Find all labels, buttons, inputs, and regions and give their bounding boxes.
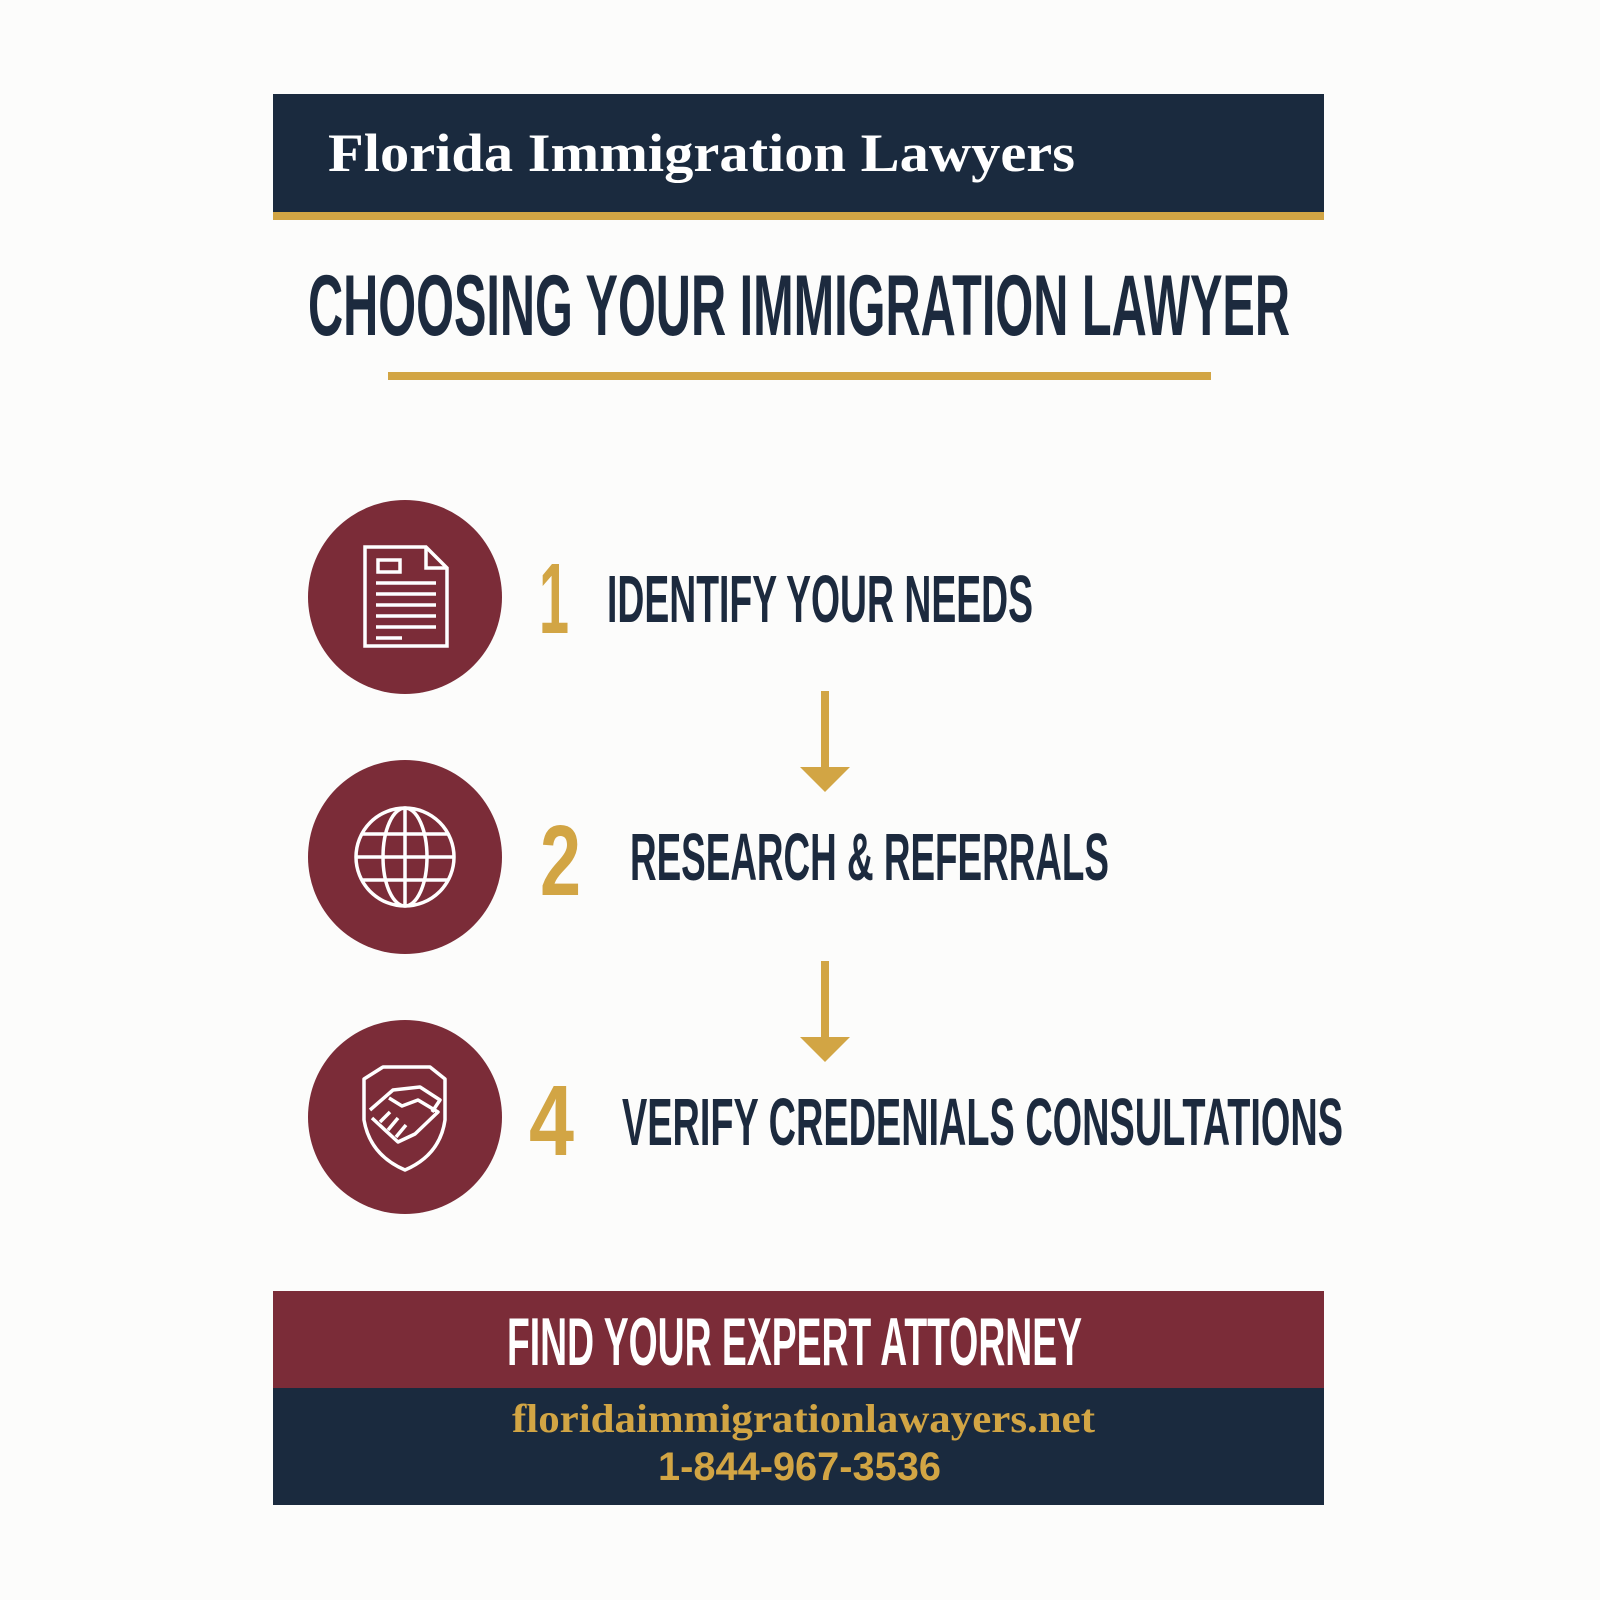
step 1 xyxy=(308,500,1033,694)
icon: globe xyxy=(308,760,502,954)
contact bar: 1-844-967-3536 xyxy=(658,1445,941,1489)
number 4: 4 xyxy=(529,1065,574,1177)
footer CTA bar xyxy=(273,1291,1324,1388)
step text 1: IDENTIFY YOUR NEEDS xyxy=(607,562,1033,637)
step 3 xyxy=(308,1020,1343,1214)
header bar: Florida Immigration Lawyers xyxy=(328,123,1075,183)
header bar xyxy=(273,94,1324,220)
number 2: 2 xyxy=(540,805,581,917)
title underline xyxy=(388,372,1211,380)
arrow 1 xyxy=(800,691,850,792)
contact bar xyxy=(273,1388,1324,1505)
step text 2: RESEARCH & REFERRALS xyxy=(630,820,1109,895)
step 2 xyxy=(308,760,1109,954)
contact bar: floridaimmigrationlawayers.net xyxy=(512,1396,1096,1441)
footer CTA bar: FIND YOUR EXPERT ATTORNEY xyxy=(507,1304,1082,1380)
icon: document xyxy=(308,500,502,694)
icon: shield handshake xyxy=(308,1020,502,1214)
arrow 2 xyxy=(800,961,850,1062)
number 1: 1 xyxy=(539,543,569,655)
